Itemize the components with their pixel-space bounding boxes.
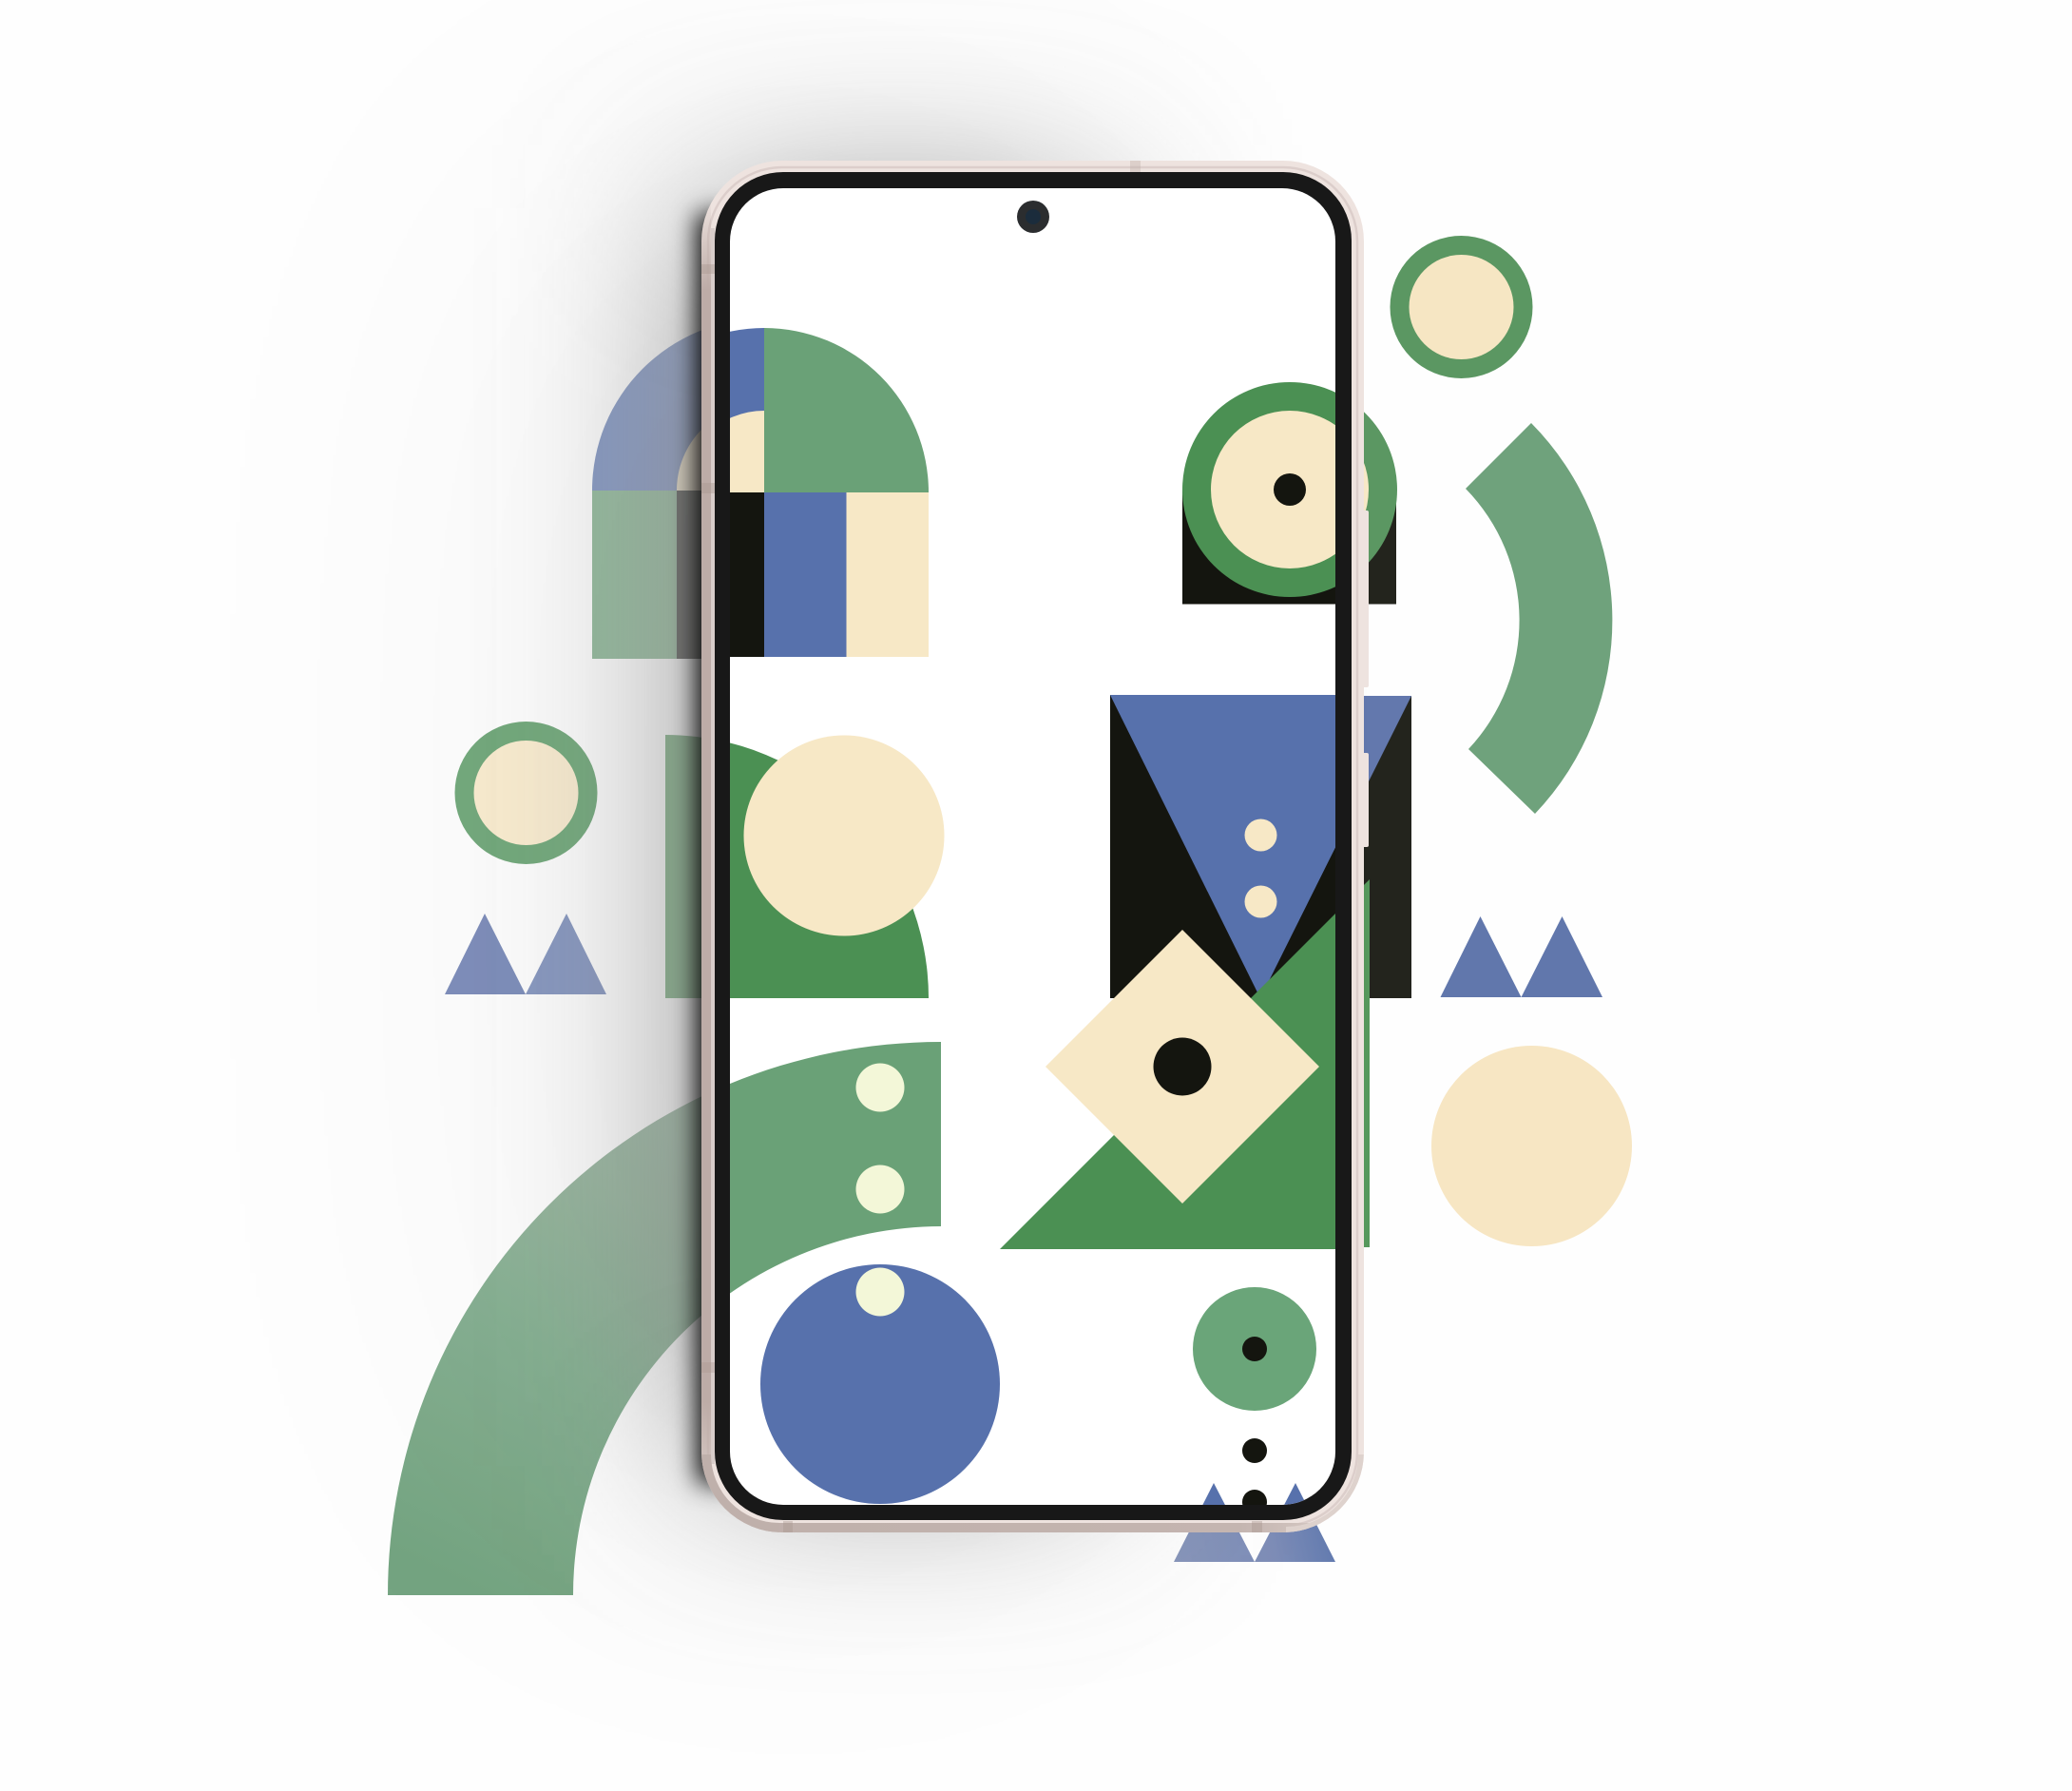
arch block [730,328,929,657]
eye block [1182,382,1335,605]
green dome block left [665,735,760,998]
black dots [1242,1438,1267,1514]
top right ring [1390,236,1532,378]
phone screen [730,188,1335,1505]
left ring [454,722,597,864]
large green arc [388,1042,941,1595]
bottom triangles overflow [1174,1483,1335,1562]
green dome and cream circle [730,736,945,998]
triangle block overflow [1000,696,1411,1247]
camera [1017,201,1049,233]
green triangle [1000,879,1370,1249]
phone [701,161,1369,1532]
phone frame [701,161,1364,1532]
blue circle with dot [760,1264,1000,1504]
arch block left [592,318,764,659]
right green arc [1466,423,1612,814]
triangle block [1110,695,1335,998]
green arc with dots [388,1042,941,1595]
blue triangles [1174,1483,1335,1562]
white fade over left shapes [570,314,701,1008]
phone bezel [715,172,1352,1520]
eye block overflow [1182,382,1397,605]
cream diamond [1046,930,1319,1204]
screen artwork [730,328,1335,1505]
shapes behind the phone [388,236,1632,1595]
phone drop shadow [532,190,1093,1483]
right triangles [1441,916,1602,997]
cream circle [1431,1046,1632,1246]
green circle with black dot [1193,1287,1316,1411]
phone side buttons [1359,510,1369,847]
left triangles [445,914,606,994]
